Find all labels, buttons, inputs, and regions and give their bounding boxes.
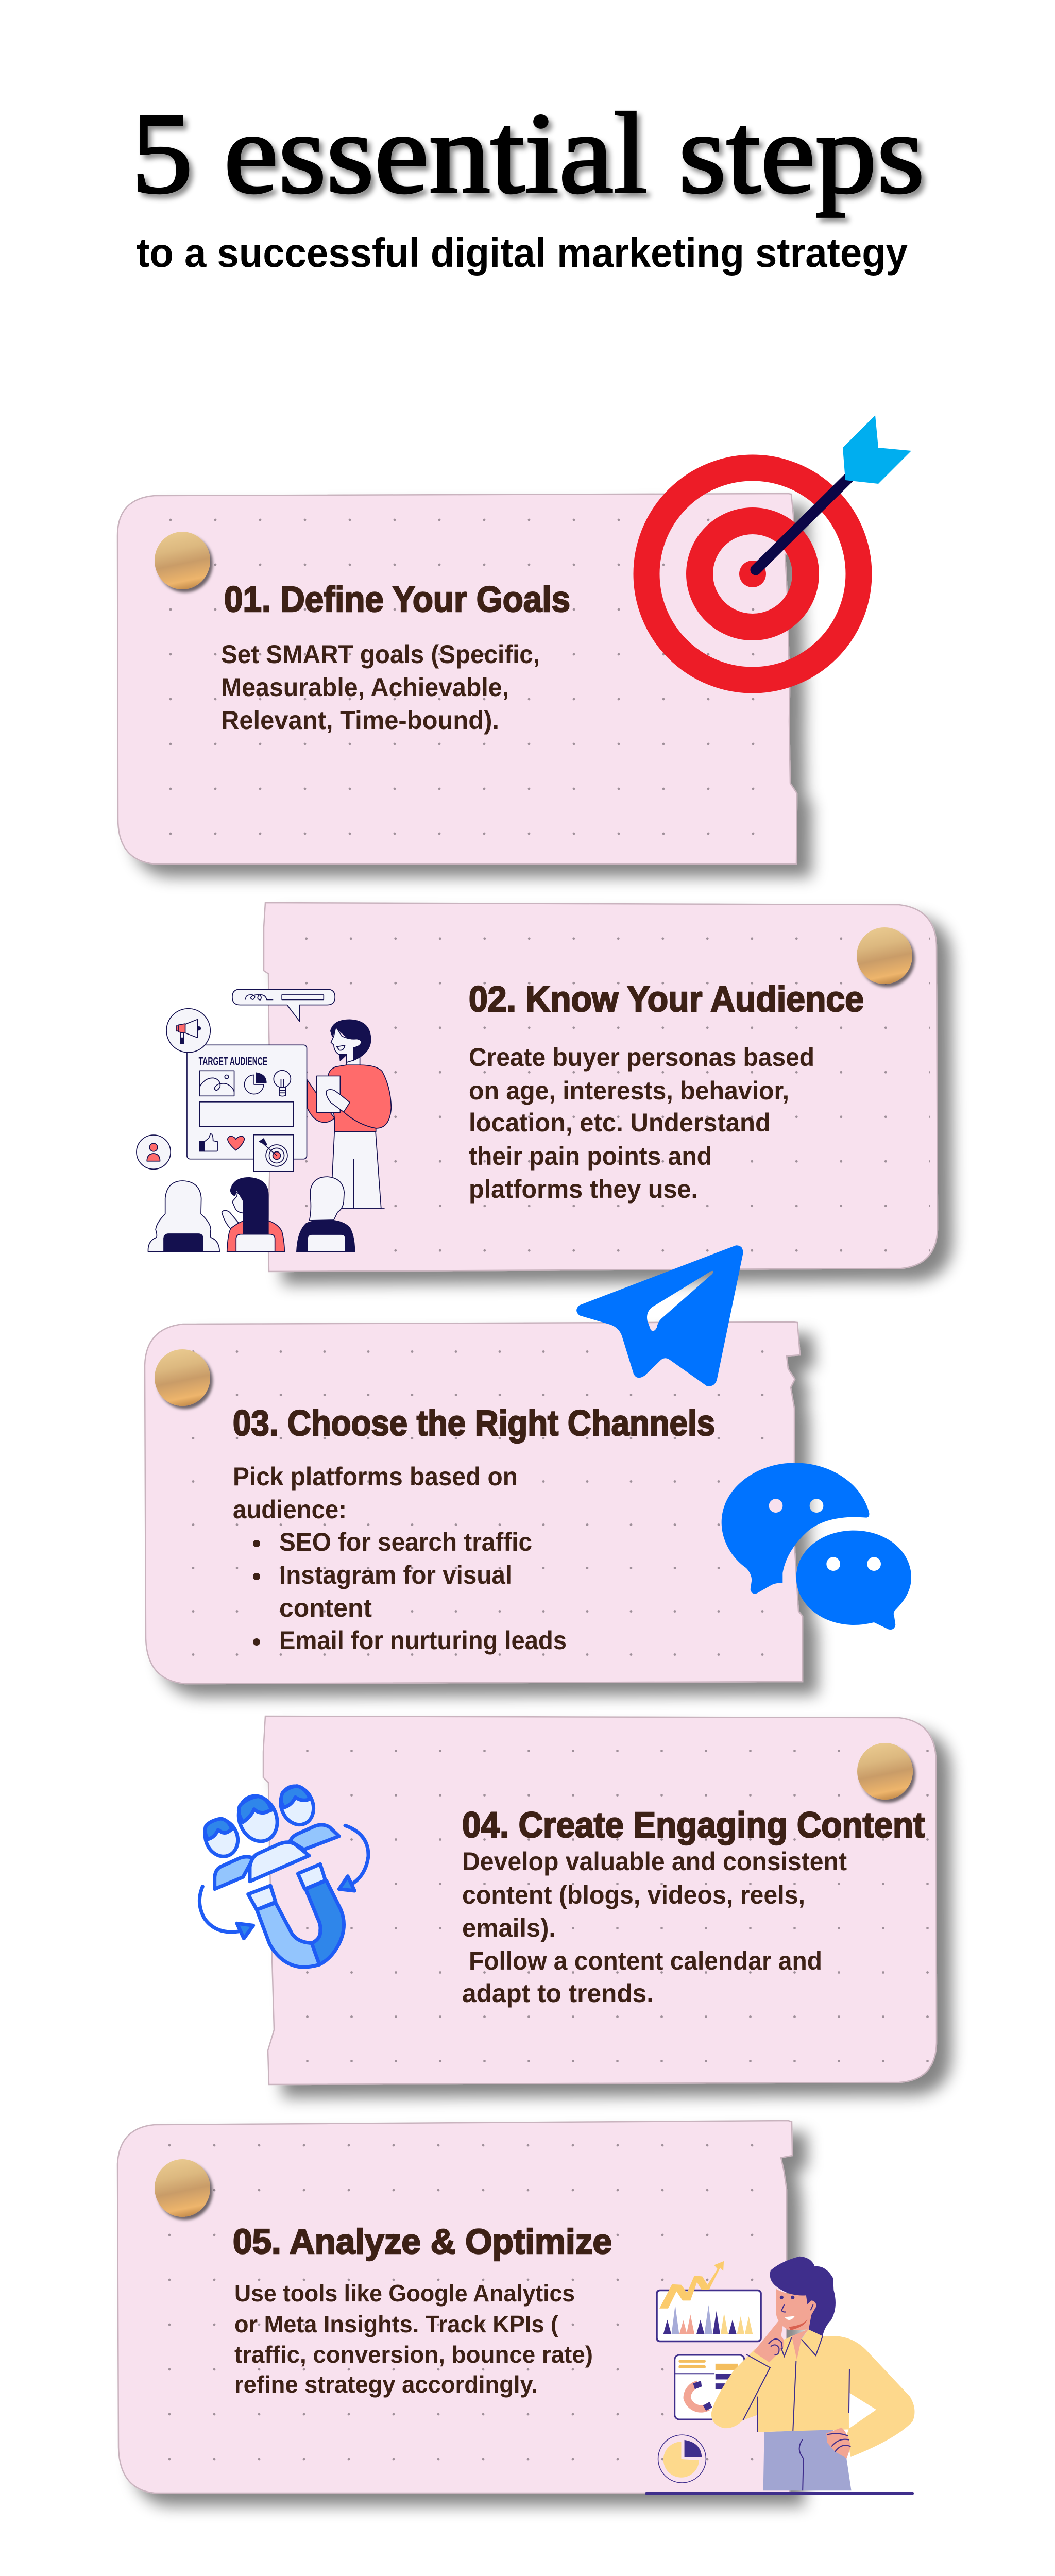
text: step 4 body: Develop valuable and consistent xyxy=(462,1847,847,1876)
text: step 3 intro: audience: xyxy=(233,1495,347,1524)
pie chart badge xyxy=(658,2435,706,2483)
megaphone badge xyxy=(166,1009,210,1053)
icon: target with arrow xyxy=(646,415,911,680)
text: step 2 body: on age, interests, behavior, xyxy=(469,1076,789,1105)
text: step 4 body: content (blogs, videos, reels, xyxy=(462,1880,805,1909)
text: step 2 body: platforms they use. xyxy=(469,1175,698,1204)
spike chart card xyxy=(657,2291,761,2341)
panel: step 1 define your goals xyxy=(117,494,797,864)
list: step 3 channels: content xyxy=(279,1594,372,1622)
presenter xyxy=(307,1020,391,1209)
right arrow xyxy=(339,1825,368,1891)
board: TARGET AUDIENCE xyxy=(199,1055,267,1068)
list: step 3 channels: SEO for search traffic xyxy=(279,1528,532,1556)
text: step 5 body: traffic, conversion, bounce rate) xyxy=(234,2341,593,2368)
board xyxy=(187,1045,307,1159)
person badge xyxy=(137,1135,171,1169)
icon: paper plane xyxy=(576,1245,743,1386)
pin xyxy=(857,1743,913,1800)
heading: step 4: 04. Create Engaging Content xyxy=(462,1805,925,1845)
text: step 1 body: Set SMART goals (Specific, xyxy=(221,640,540,669)
text: step 3 intro: Pick platforms based on xyxy=(233,1462,518,1491)
text: step 4 body xyxy=(462,1847,847,2008)
panel: step 2 know your audience xyxy=(264,903,938,1272)
subtitle: to a successful digital marketing strategy xyxy=(137,230,908,276)
text: step 3 intro xyxy=(233,1462,518,1524)
text: step 4 body: adapt to trends. xyxy=(462,1979,654,2008)
text: step 2 body xyxy=(469,1043,814,1204)
icon: chat bubbles xyxy=(722,1463,911,1630)
panel: step 3 choose the right channels xyxy=(145,1322,803,1684)
magnet xyxy=(248,1864,344,1967)
icon: magnet attracting people xyxy=(199,1781,368,1967)
text: step 2 body: location, etc. Understand xyxy=(469,1108,771,1137)
panel: step 5 analyze and optimize xyxy=(117,2121,792,2493)
heading: step 5: 05. Analyze & Optimize xyxy=(233,2222,612,2261)
title: 5 essential steps xyxy=(131,89,925,217)
people bodies xyxy=(215,1825,339,1889)
pin xyxy=(155,2159,210,2217)
list: step 3 channels: Instagram for visual xyxy=(279,1561,512,1589)
text: step 2 body: Create buyer personas based xyxy=(469,1043,814,1072)
audience member two xyxy=(222,1178,284,1252)
text: step 5 body: Use tools like Google Analytics xyxy=(234,2280,575,2307)
text: step 5 body xyxy=(234,2280,593,2398)
text: step 1 body: Relevant, Time-bound). xyxy=(221,706,499,735)
person heads xyxy=(200,1781,319,1861)
list: step 3 channels: Email for nurturing leads xyxy=(279,1626,567,1655)
panel: step 4 create engaging content xyxy=(263,1716,937,2084)
list: step 3 channels xyxy=(253,1528,567,1655)
audience member three xyxy=(297,1177,354,1252)
pin xyxy=(857,927,912,984)
dashboard card xyxy=(675,2355,744,2419)
text: step 5 body: refine strategy accordingly. xyxy=(234,2371,538,2398)
illustration: target audience presentation xyxy=(137,989,391,1252)
small target card xyxy=(253,1135,294,1171)
heading: step 1: 01. Define Your Goals xyxy=(224,579,570,619)
heading: step 2: 02. Know Your Audience xyxy=(469,979,864,1019)
left arrow xyxy=(199,1887,253,1939)
speech bubble xyxy=(232,989,335,1022)
text: step 5 body: or Meta Insights. Track KPIs ( xyxy=(234,2311,559,2337)
pin xyxy=(155,532,210,589)
ground line xyxy=(645,2492,914,2495)
analyst figure xyxy=(711,2257,915,2490)
text: step 1 body: Measurable, Achievable, xyxy=(221,673,509,702)
text: step 4 body: Follow a content calendar and xyxy=(469,1946,822,1975)
text: step 2 body: their pain points and xyxy=(469,1142,712,1171)
text: step 4 body: emails). xyxy=(462,1913,556,1942)
pin xyxy=(155,1349,210,1406)
text: step 1 body xyxy=(221,640,540,735)
heading: step 3: 03. Choose the Right Channels xyxy=(233,1403,715,1443)
illustration: analyst with charts xyxy=(645,2257,915,2495)
audience member one xyxy=(148,1181,219,1252)
rising trend arrow xyxy=(659,2261,724,2309)
